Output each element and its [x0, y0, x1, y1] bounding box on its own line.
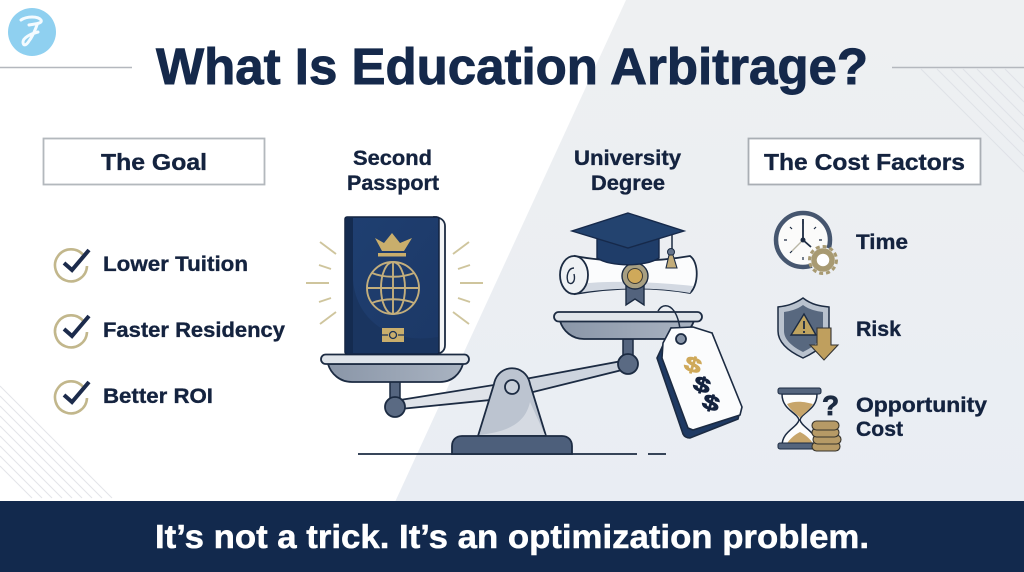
title: What Is Education Arbitrage? [156, 38, 868, 95]
icon: shield with warning and down arrow [778, 298, 838, 360]
right pan plate [554, 312, 702, 322]
decorative diagonal lines top right [921, 69, 1024, 172]
panel: the goal [44, 138, 285, 413]
dollar signs: $ [681, 351, 705, 379]
cost factors heading box [748, 138, 980, 184]
fulcrum base [452, 436, 572, 454]
goal item: faster residency: Faster Residency [103, 319, 285, 342]
icon: passport [345, 217, 445, 354]
ribbon [626, 284, 644, 305]
title rules [0, 66, 1024, 68]
label: second passport: Second [353, 147, 432, 170]
cap skull [597, 235, 659, 265]
left pan stem [390, 381, 400, 401]
goal item: lower tuition [55, 249, 248, 281]
beam left arm [400, 384, 500, 409]
crown [375, 233, 412, 256]
footer text: It’s not a trick. It’s an optimization problem. [155, 518, 869, 555]
text: opportunity cost [856, 394, 987, 441]
right pan bowl [560, 321, 694, 339]
tassel [671, 235, 673, 250]
fulcrum [478, 368, 546, 436]
panel: the cost factors [748, 138, 987, 451]
icon: passport shine rays [306, 242, 483, 324]
logo badge [8, 8, 56, 56]
left pan plate [321, 354, 469, 364]
right pan stem [623, 339, 633, 357]
icon: hourglass with coins [778, 388, 841, 451]
cost factors heading: The Cost Factors [764, 149, 965, 175]
text: opportunity cost: Cost [856, 418, 903, 441]
ground line [358, 453, 666, 455]
footer banner [0, 501, 1024, 572]
icon: price tag [657, 306, 742, 438]
icon: price tag: $ [699, 389, 723, 417]
decorative diagonal lines bottom left [0, 386, 112, 498]
scroll [575, 256, 697, 294]
label: university degree: Degree [591, 172, 665, 195]
icon: degree scroll and cap [560, 213, 697, 305]
goal heading box [44, 138, 264, 184]
cap board [572, 213, 684, 248]
illustration: balance scale [321, 312, 702, 454]
left pivot [385, 397, 405, 417]
label: second passport: Passport [347, 172, 439, 195]
goal item: better roi [55, 381, 213, 413]
text: opportunity cost: Opportunity [856, 394, 987, 417]
fulcrum highlight [479, 402, 545, 435]
right pivot [618, 354, 638, 374]
seal [622, 263, 648, 289]
fulcrum joint [505, 380, 519, 394]
label: university degree: University [574, 147, 681, 170]
goal item: better roi: Better ROI [103, 385, 213, 408]
left pan bowl [328, 364, 463, 382]
icon: clock with gear [776, 213, 836, 274]
text: time: Time [856, 231, 908, 254]
icon: price tag: $ [690, 371, 714, 399]
globe [367, 262, 419, 314]
label: second passport [347, 147, 439, 195]
goal item: faster residency [55, 315, 285, 347]
text: risk: Risk [856, 318, 901, 341]
goal heading: The Goal [101, 149, 207, 175]
beam right arm [525, 361, 622, 394]
goal item: lower tuition: Lower Tuition [103, 253, 248, 276]
icon: hourglass with coins: ? [822, 390, 839, 421]
chip [382, 328, 404, 342]
label: university degree [574, 147, 681, 195]
